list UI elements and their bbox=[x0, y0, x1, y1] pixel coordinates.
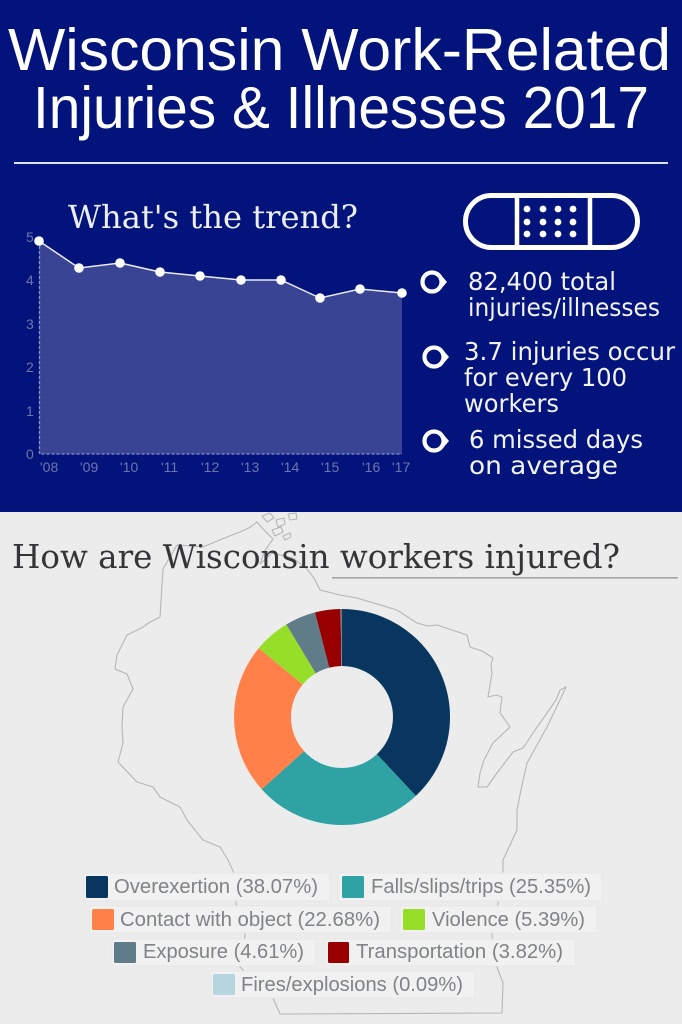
legend item: fires bbox=[211, 971, 475, 998]
x axis labels: '12 bbox=[201, 459, 219, 475]
map: Wisconsin outline bbox=[115, 513, 566, 1014]
legend item: transportation bbox=[325, 939, 575, 966]
legend item: violence bbox=[400, 906, 597, 933]
legend item: violence: Violence (5.39%) bbox=[432, 909, 585, 931]
legend item: exposure bbox=[112, 939, 316, 966]
legend item: falls: Falls/slips/trips (25.35%) bbox=[371, 876, 591, 898]
x axis labels: '10 bbox=[120, 459, 138, 475]
area fill bbox=[39, 241, 402, 454]
y axis labels: 2 bbox=[26, 359, 34, 375]
heading underline bbox=[332, 577, 678, 579]
stat: total injuries bbox=[422, 267, 660, 322]
stat: total injuries: 82,400 total bbox=[468, 267, 616, 296]
stat: total injuries: injuries/illnesses bbox=[468, 293, 660, 322]
legend item: overexertion: Overexertion (38.07%) bbox=[114, 876, 318, 898]
legend bbox=[84, 873, 602, 998]
x axis labels: '13 bbox=[241, 459, 259, 475]
stat: rate per 100 workers: 3.7 injuries occur bbox=[464, 337, 676, 366]
legend item: exposure: Exposure (4.61%) bbox=[143, 941, 304, 963]
axes bbox=[40, 241, 402, 454]
x axis labels: '11 bbox=[161, 459, 178, 475]
icon: bullet ring bbox=[422, 272, 447, 292]
x axis labels: '08 bbox=[40, 459, 58, 475]
stat: missed days: on average bbox=[469, 451, 618, 480]
divider rule bbox=[14, 162, 668, 164]
legend item: contact with object: Contact with object (22.68%) bbox=[120, 909, 380, 931]
trend line bbox=[39, 241, 402, 298]
legend item: falls bbox=[338, 873, 602, 901]
y axis labels: 0 bbox=[26, 446, 34, 462]
x axis labels: '16 bbox=[362, 459, 380, 475]
data points bbox=[34, 236, 407, 303]
x axis labels: '17 bbox=[392, 459, 410, 475]
panel: light lower background bbox=[0, 512, 682, 1024]
x axis labels bbox=[40, 459, 410, 475]
y axis labels bbox=[26, 229, 34, 462]
legend item: transportation: Transportation (3.82%) bbox=[356, 941, 563, 963]
x axis labels: '15 bbox=[321, 459, 339, 475]
donut chart: injury causes bbox=[262, 638, 422, 796]
stat: rate per 100 workers: workers bbox=[464, 389, 559, 418]
stat: missed days bbox=[424, 425, 643, 480]
y axis labels: 3 bbox=[26, 316, 34, 332]
x axis labels: '14 bbox=[281, 459, 299, 475]
title: Injuries & Illnesses 2017 bbox=[33, 75, 649, 141]
y axis labels: 1 bbox=[26, 403, 34, 419]
area chart: injury rate 2008-2017 bbox=[26, 229, 410, 475]
icon: bullet ring bbox=[424, 432, 449, 450]
legend item: contact with object bbox=[90, 906, 391, 933]
stat: rate per 100 workers bbox=[424, 337, 676, 418]
title: Wisconsin Work-Related bbox=[8, 17, 671, 83]
legend item: fires: Fires/explosions (0.09%) bbox=[241, 974, 463, 996]
heading: how are workers injured: How are Wisconsin workers injured? bbox=[12, 537, 620, 576]
icon: bandage bbox=[466, 195, 638, 248]
heading: trend: What's the trend? bbox=[68, 198, 358, 236]
y axis labels: 5 bbox=[26, 229, 34, 245]
x axis labels: '09 bbox=[80, 459, 98, 475]
y axis labels: 4 bbox=[26, 272, 34, 288]
icon: bullet ring bbox=[424, 348, 449, 366]
stat: rate per 100 workers: for every 100 bbox=[464, 363, 627, 392]
stat: missed days: 6 missed days bbox=[469, 425, 643, 454]
legend item: overexertion bbox=[84, 873, 330, 901]
title bbox=[8, 17, 671, 141]
panel: blue header and trend section bbox=[0, 0, 682, 512]
